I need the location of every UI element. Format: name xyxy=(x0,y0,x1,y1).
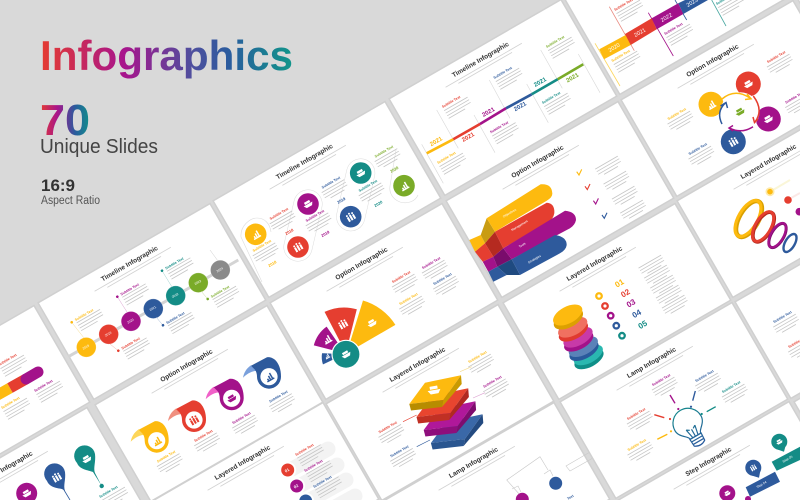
text lines xyxy=(595,156,647,221)
panel: rings slide xyxy=(676,101,800,298)
text block: red: Subtitle Text xyxy=(294,443,315,457)
year labels xyxy=(82,266,224,351)
text block: yellow xyxy=(250,238,285,272)
text block: red xyxy=(191,428,221,454)
title: Lamp Infographic xyxy=(626,346,678,380)
leader lines xyxy=(403,367,485,447)
text block: magenta: Subtitle Text xyxy=(421,256,442,270)
text block: teal: Subtitle Text xyxy=(721,380,742,394)
text block: red xyxy=(441,92,472,118)
text block: magenta: Subtitle Text xyxy=(664,22,684,36)
text block: yellow: Subtitle Text xyxy=(468,350,488,364)
year labels: 2023 xyxy=(194,279,202,286)
text block: teal: Subtitle Text xyxy=(358,179,379,193)
title xyxy=(434,438,516,493)
text block: yellow xyxy=(0,393,31,419)
title: Layered Infographic xyxy=(214,444,272,482)
circle: blue xyxy=(549,477,562,490)
pin: magenta xyxy=(16,483,37,500)
text block: red: Subtitle Text xyxy=(391,270,412,284)
text block: magenta xyxy=(304,456,334,482)
ratio: 16:9: 16:9 xyxy=(41,176,75,195)
text block: red xyxy=(614,0,644,21)
circle icons xyxy=(251,168,410,252)
grey pills xyxy=(292,449,355,500)
text block: yellow: Subtitle Text xyxy=(667,107,688,121)
leader lines xyxy=(72,250,218,351)
text block: yellow xyxy=(465,349,495,375)
text block: blue xyxy=(692,368,722,394)
text block: yellow: Subtitle Text xyxy=(399,292,419,306)
text block: blue: Subtitle Text xyxy=(688,142,709,156)
title xyxy=(265,137,347,192)
text block: blue: Subtitle Text xyxy=(165,311,186,325)
text block: red xyxy=(764,49,794,75)
panel: option circular arrows slide xyxy=(620,0,800,197)
fan icons xyxy=(322,318,378,359)
circle: magenta xyxy=(516,493,529,500)
year labels: 2021 xyxy=(149,305,157,312)
year labels: 2021 xyxy=(633,27,647,39)
text block: teal xyxy=(160,253,195,282)
timeline circles xyxy=(245,162,415,258)
title xyxy=(378,340,460,395)
text block: teal xyxy=(356,178,391,212)
title xyxy=(498,137,580,192)
timeline ribbon xyxy=(427,64,583,153)
text block: blue: Subtitle Text xyxy=(695,369,715,383)
text block: blue xyxy=(319,174,354,209)
pin: magenta xyxy=(719,485,735,500)
panel: slide with year bars xyxy=(0,305,91,500)
text block: red xyxy=(267,206,302,240)
year bars xyxy=(0,372,38,397)
panel: option 3D arrows slide xyxy=(445,101,675,298)
text block: magenta xyxy=(303,208,338,242)
leader lines xyxy=(422,50,600,183)
rays xyxy=(654,391,716,439)
title: Option Infographic xyxy=(334,246,389,282)
text block: magenta xyxy=(782,89,800,115)
text block: magenta: Subtitle Text xyxy=(651,373,672,387)
text block: red xyxy=(376,419,406,445)
heading: Infographics: Infographics xyxy=(40,32,293,79)
text block: red xyxy=(116,333,151,362)
text block: teal xyxy=(715,0,746,15)
text block: yellow: Subtitle Text xyxy=(436,151,457,165)
numbers: 04 xyxy=(631,307,643,320)
text block: yellow: Subtitle Text xyxy=(252,239,273,253)
numbered circles: 02 xyxy=(293,483,300,489)
numbered circles: 01 xyxy=(284,467,291,473)
text block: magenta xyxy=(649,372,679,398)
title: Lamp Infographic xyxy=(448,446,500,480)
check marks xyxy=(577,169,607,218)
text block: yellow xyxy=(70,305,105,333)
connector line xyxy=(68,260,238,357)
ribbon: blue xyxy=(243,357,281,389)
text block: red xyxy=(389,269,419,295)
panel: lamp outline slide xyxy=(381,402,611,500)
bar labels: Objectives xyxy=(502,207,517,219)
text block: blue: Subtitle Text xyxy=(390,444,410,458)
pin: teal xyxy=(74,445,104,488)
text block: teal xyxy=(98,482,129,500)
title xyxy=(322,239,404,294)
text block: yellow: Subtitle Text xyxy=(611,49,631,63)
text block: yellow: Subtitle Text xyxy=(74,308,95,322)
panel: corner slide top right xyxy=(796,0,800,95)
text block: yellow xyxy=(665,106,695,132)
panel: corner slide bottom right xyxy=(793,302,800,499)
text block: yellow xyxy=(154,448,184,474)
year labels: 2020 xyxy=(126,318,135,325)
text block: green: 2020 xyxy=(389,165,400,174)
pin: teal xyxy=(771,434,787,452)
circular arrows xyxy=(720,93,759,131)
year labels: 2021 xyxy=(461,132,476,144)
text block: green xyxy=(206,282,241,310)
text block: teal: Subtitle Text xyxy=(541,91,562,105)
panel: option fan slide xyxy=(269,203,499,400)
panel: right slide xyxy=(734,202,800,399)
text block: red xyxy=(624,406,654,432)
text block: red xyxy=(785,334,800,360)
pin: blue xyxy=(745,460,761,478)
3D bars xyxy=(469,184,576,282)
step bars: Step 04 xyxy=(756,480,767,489)
text block: blue xyxy=(686,141,716,167)
title xyxy=(441,35,523,90)
panel: option ribbons slide xyxy=(94,305,324,500)
text block: magenta xyxy=(419,255,449,281)
text block: magenta: Subtitle Text xyxy=(483,375,503,389)
text block: teal xyxy=(541,88,572,114)
text block: yellow: 2018 xyxy=(267,259,278,268)
lamp outlines xyxy=(507,452,593,495)
title xyxy=(203,438,285,493)
step bars: Step 05 xyxy=(782,455,793,464)
ribbon: red xyxy=(168,400,206,432)
panel: cylinder stack slide xyxy=(502,203,732,400)
bar labels: Strategies xyxy=(527,254,542,264)
title xyxy=(612,338,694,393)
text block: blue xyxy=(312,472,343,498)
title: Timeline Infographic xyxy=(100,245,160,283)
text block: green xyxy=(372,143,407,178)
timeline circles xyxy=(76,260,230,357)
title xyxy=(90,239,172,294)
text block: yellow: Subtitle Text xyxy=(1,396,21,410)
text block: red: Subtitle Text xyxy=(269,207,290,221)
text block: teal xyxy=(719,379,749,405)
text block: teal: Subtitle Text xyxy=(164,256,185,270)
text block: red: Subtitle Text xyxy=(121,336,141,350)
text block: teal: 2020 xyxy=(373,199,384,208)
text block: yellow xyxy=(611,46,642,72)
year labels: 2021 xyxy=(513,101,528,113)
text block: red: Subtitle Text xyxy=(441,95,462,109)
text block: blue xyxy=(430,271,460,297)
title xyxy=(0,443,49,498)
title: Timeline Infographic xyxy=(275,143,335,181)
text block: yellow: Subtitle Text xyxy=(627,438,648,452)
text block: red: 2018 xyxy=(284,227,295,236)
option circles xyxy=(698,72,781,154)
title xyxy=(555,239,637,294)
year labels: 2022 xyxy=(660,12,674,24)
year labels xyxy=(429,72,581,148)
panel: timeline ribbon slide xyxy=(388,0,618,196)
ribbon: yellow xyxy=(131,421,169,453)
panel: step slide xyxy=(616,401,800,500)
text block: red xyxy=(0,350,28,376)
panel: option pins slide xyxy=(0,407,144,500)
leader lines xyxy=(595,0,726,86)
year labels: 2021 xyxy=(482,107,497,119)
panel: timeline circles row slide xyxy=(37,203,267,400)
text block: green: Subtitle Text xyxy=(374,144,395,159)
capsule outlines xyxy=(241,150,418,282)
title xyxy=(729,137,800,192)
panel: layered pills slide xyxy=(150,402,380,500)
panel: timeline pills slide xyxy=(212,101,442,298)
text block: magenta xyxy=(229,410,259,436)
pale leader lines xyxy=(773,180,800,198)
text block: magenta xyxy=(664,19,694,45)
text block: magenta xyxy=(115,279,150,308)
text block: green xyxy=(545,32,576,58)
text block: green: Subtitle Text xyxy=(545,35,566,49)
text block: blue xyxy=(161,308,196,336)
year labels: 2018 xyxy=(82,344,90,351)
year labels: 2024 xyxy=(216,266,224,273)
text block: yellow xyxy=(396,291,426,317)
text block: blue xyxy=(493,63,524,89)
text block: blue: 2019 xyxy=(336,196,347,205)
text block: blue xyxy=(266,388,296,414)
text block: blue: Subtitle Text xyxy=(433,272,453,286)
text block: teal: Subtitle Text xyxy=(98,485,119,499)
pin: blue xyxy=(44,463,70,500)
text block: magenta: 2019 xyxy=(320,229,331,238)
text block: green: Subtitle Text xyxy=(210,284,231,299)
caption: Aspect Ratio: Aspect Ratio xyxy=(41,195,100,207)
plate stack xyxy=(409,375,483,450)
numbers: 02 xyxy=(619,287,632,299)
text block: red: Subtitle Text xyxy=(766,50,787,64)
title: Layered Infographic xyxy=(566,245,624,283)
dot: magenta xyxy=(745,496,751,500)
text block: blue xyxy=(387,443,417,469)
numbers: 05 xyxy=(637,318,649,331)
bar labels xyxy=(502,207,542,264)
numbered circles xyxy=(279,462,314,500)
text block: magenta xyxy=(34,376,64,402)
numbers xyxy=(613,277,649,331)
text block: magenta xyxy=(489,117,520,144)
ribbon: magenta xyxy=(206,379,244,410)
text block: blue: Subtitle Text xyxy=(269,389,289,404)
title: Option Infographic xyxy=(510,144,565,180)
text lines xyxy=(639,255,689,316)
title xyxy=(147,341,229,396)
text block: yellow xyxy=(625,437,655,463)
text block: red: Subtitle Text xyxy=(194,429,214,443)
numbers: 03 xyxy=(625,297,638,309)
title xyxy=(673,36,755,91)
panel: layered plates slide xyxy=(325,304,555,500)
text block: yellow xyxy=(436,148,467,174)
text block: blue xyxy=(770,309,800,335)
title: Option Infographic xyxy=(159,348,214,384)
text block: blue: Subtitle Text xyxy=(493,66,513,80)
text block: magenta: Subtitle Text xyxy=(489,120,510,134)
light bulb xyxy=(668,403,713,452)
text block: red xyxy=(294,440,325,466)
year labels: 2019 xyxy=(104,331,112,338)
centre icon xyxy=(734,107,746,117)
ray dots xyxy=(669,406,703,432)
bar labels: Tools xyxy=(518,241,527,249)
title: Step Infographic xyxy=(684,446,733,478)
number: 70: 70 xyxy=(40,96,90,145)
year band xyxy=(599,0,708,59)
text block: magenta: Subtitle Text xyxy=(304,459,324,473)
panel: lamp bulb slide xyxy=(559,302,789,499)
year labels: 2022 xyxy=(171,292,179,299)
fan chart xyxy=(313,300,396,368)
text block: magenta: Subtitle Text xyxy=(120,282,140,296)
circle icons xyxy=(706,79,774,147)
text block: magenta: Subtitle Text xyxy=(305,209,326,223)
text block: red: Subtitle Text xyxy=(378,420,399,434)
year labels: 2021 xyxy=(566,72,581,84)
title xyxy=(669,437,751,492)
title: Layered Infographic xyxy=(740,143,798,181)
step bars xyxy=(746,447,800,497)
year labels xyxy=(608,0,699,54)
text block: magenta: Subtitle Text xyxy=(232,411,252,425)
cylinder discs xyxy=(550,300,607,374)
dots xyxy=(766,187,800,216)
title: Timeline Infographic xyxy=(451,41,511,79)
year labels: 2020 xyxy=(608,42,621,54)
text block: magenta xyxy=(480,374,510,400)
rings xyxy=(730,196,799,254)
subheading: Unique Slides: Unique Slides xyxy=(40,135,158,158)
title: Layered Infographic xyxy=(389,346,447,384)
text block: blue: Subtitle Text xyxy=(312,475,333,489)
year labels: 2021 xyxy=(429,136,444,148)
text block: red: Subtitle Text xyxy=(626,407,647,421)
text block: yellow: Subtitle Text xyxy=(156,449,177,464)
icon dots xyxy=(595,292,626,340)
text block: blue: Subtitle Text xyxy=(773,310,793,324)
text block: magenta: Subtitle Text xyxy=(34,379,54,393)
bar labels: Management xyxy=(510,219,529,232)
text block: blue: Subtitle Text xyxy=(321,175,342,190)
panel: timeline 2020 slide xyxy=(563,0,793,95)
year labels: 2021 xyxy=(533,77,548,89)
title: Option Infographic xyxy=(685,43,740,79)
numbers: 01 xyxy=(613,277,626,289)
